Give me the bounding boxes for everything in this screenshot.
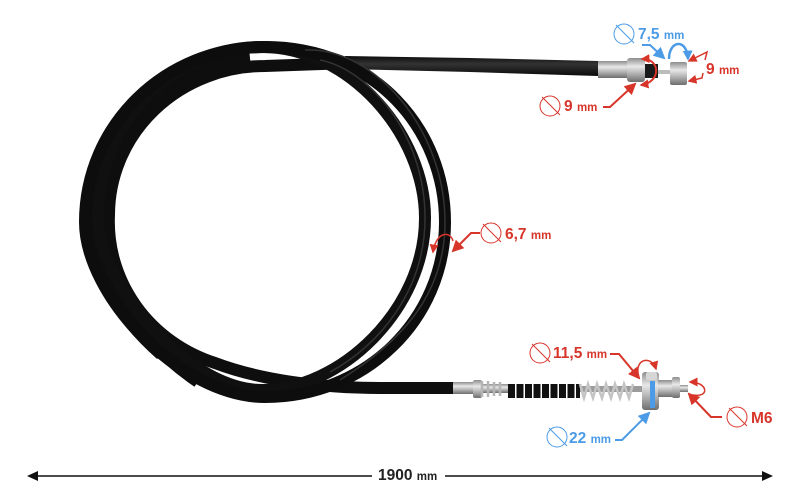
dimension arrow: total length 1900 mm: 1900 mm — [378, 467, 437, 484]
callout: 7,5 mm blue diameter: 7,5 mm — [638, 26, 684, 43]
callout: 6,7 mm cable diameter: 6,7 mm — [505, 226, 551, 243]
callout: 11,5 mm barrel diameter — [530, 343, 656, 378]
callout: 22 mm barrel length: 22 mm — [569, 430, 611, 447]
callout: 9 mm barrel length: 9 mm — [706, 61, 739, 78]
lower cable end fitting with spring — [453, 372, 688, 410]
callout: 11,5 mm barrel diameter: 11,5 mm — [553, 345, 607, 362]
callout: M6 thread — [689, 382, 773, 427]
callout: 9 mm ferrule diameter — [540, 59, 656, 116]
callout: 9 mm barrel length — [689, 52, 739, 81]
callout: 22 mm barrel length — [547, 413, 649, 447]
callout: 7,5 mm blue diameter — [614, 24, 688, 59]
dimension arrow: total length 1900 mm — [27, 467, 773, 484]
callout: 9 mm ferrule diameter: 9 mm — [564, 98, 597, 115]
coiled black brake cable — [85, 47, 598, 397]
upper cable end fitting — [598, 58, 687, 85]
callout: M6 thread: M6 — [751, 410, 773, 427]
callout: 6,7 mm cable diameter — [433, 223, 551, 252]
